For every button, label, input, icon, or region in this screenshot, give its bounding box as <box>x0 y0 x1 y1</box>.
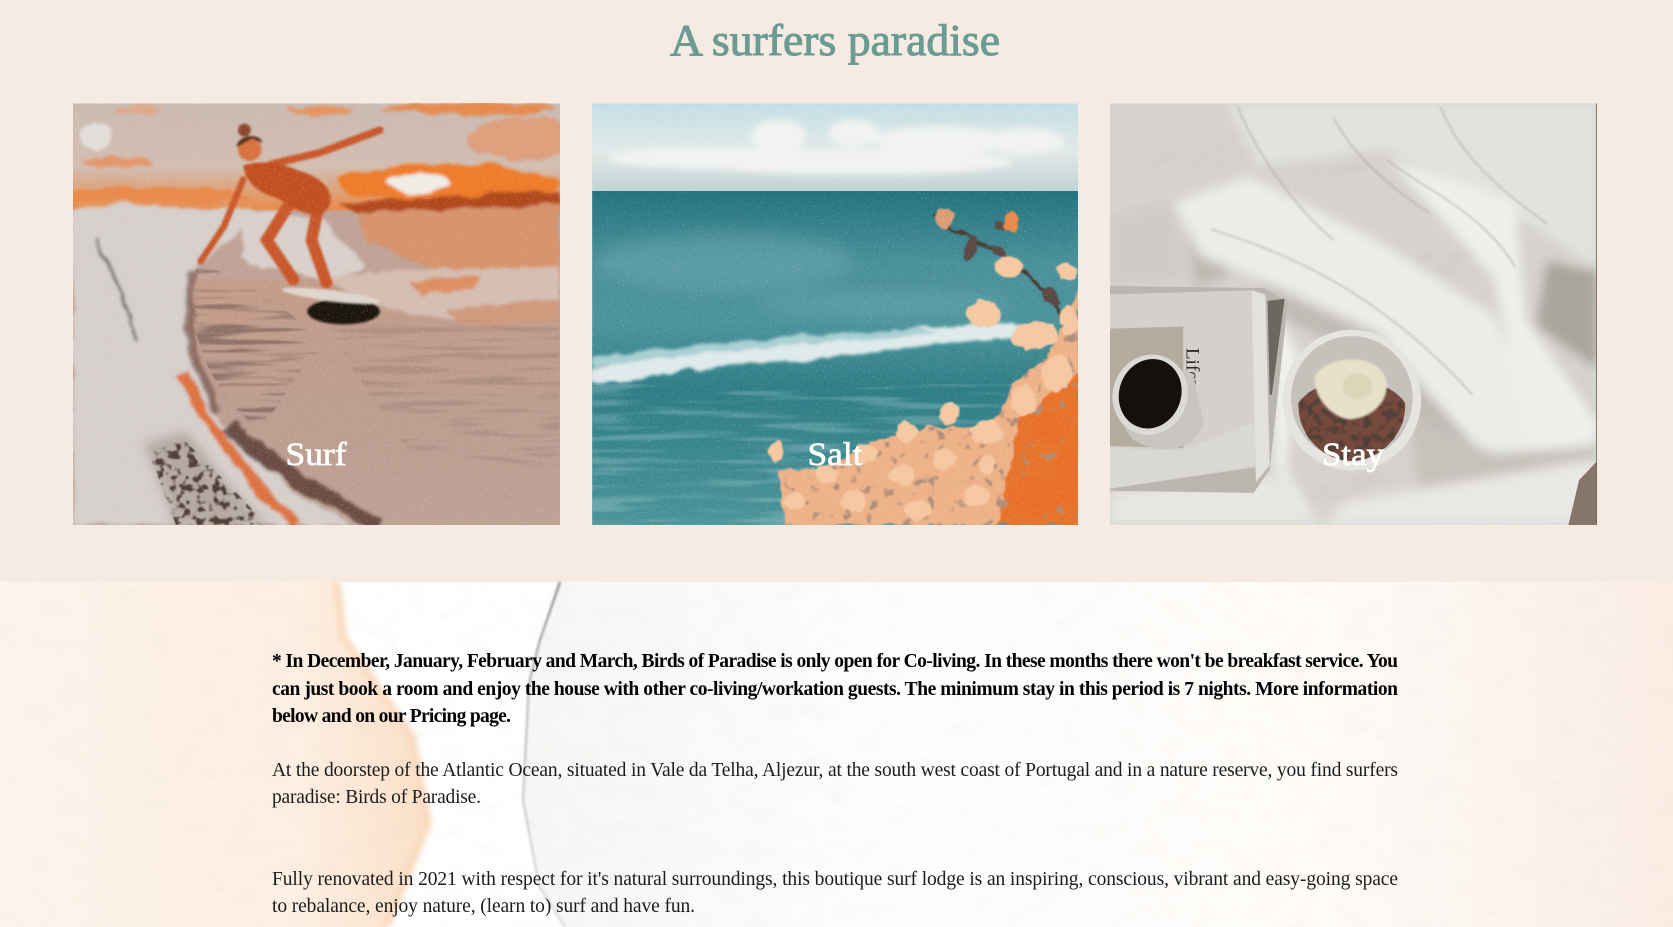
breaking wave <box>592 322 1024 382</box>
panel: salt photo <box>592 103 1080 525</box>
wave foam <box>73 205 352 525</box>
text block: location: At the doorstep of the Atlantic Ocean, situated in Vale da Telha, Aljezur, at the south west coast of Portugal and in a nature reserve, you find surfers <box>272 760 1398 781</box>
text block: location <box>272 760 1398 808</box>
text block: renovation: to rebalance, enjoy nature, (learn to) surf and have fun. <box>272 896 695 917</box>
icon: coffee cup <box>1112 354 1204 450</box>
panel: watercolour paper background <box>0 582 1673 927</box>
flowering branch <box>768 209 1080 525</box>
wave dark curve <box>229 427 379 525</box>
bed linen folds <box>1110 103 1597 525</box>
magazine: Lifew <box>1181 348 1202 394</box>
icon: breakfast bowl <box>1282 330 1421 471</box>
panel: stay photo <box>1101 103 1597 525</box>
magazine <box>1110 286 1288 493</box>
text block: co-living notice: * In December, January, February and March, Birds of Paradise is only open for Co-living. In these months there won't be breakfast service. You <box>272 651 1398 672</box>
text block: renovation: Fully renovated in 2021 with respect for it's natural surroundings, this boutique surf lodge is an inspiring, conscious, vibrant and easy-going space <box>272 869 1398 890</box>
text block: co-living notice: can just book a room and enjoy the house with other co-living/workation guests. The minimum stay in this period is 7 nights. More information <box>272 679 1398 700</box>
panel: surf photo <box>48 102 576 525</box>
text block: renovation <box>272 869 1398 917</box>
panel: top section background <box>0 0 1673 582</box>
label: Surf: Surf <box>286 437 346 473</box>
text block: co-living notice: below and on our Pricing page. <box>272 706 511 727</box>
clouds <box>608 119 1065 175</box>
label: Stay: Stay <box>1322 437 1385 473</box>
text block: location: paradise: Birds of Paradise. <box>272 787 481 808</box>
label: Salt: Salt <box>808 437 862 473</box>
surfer <box>201 124 380 324</box>
title: A surfers paradise <box>670 16 1000 65</box>
text block: co-living notice <box>272 651 1398 727</box>
